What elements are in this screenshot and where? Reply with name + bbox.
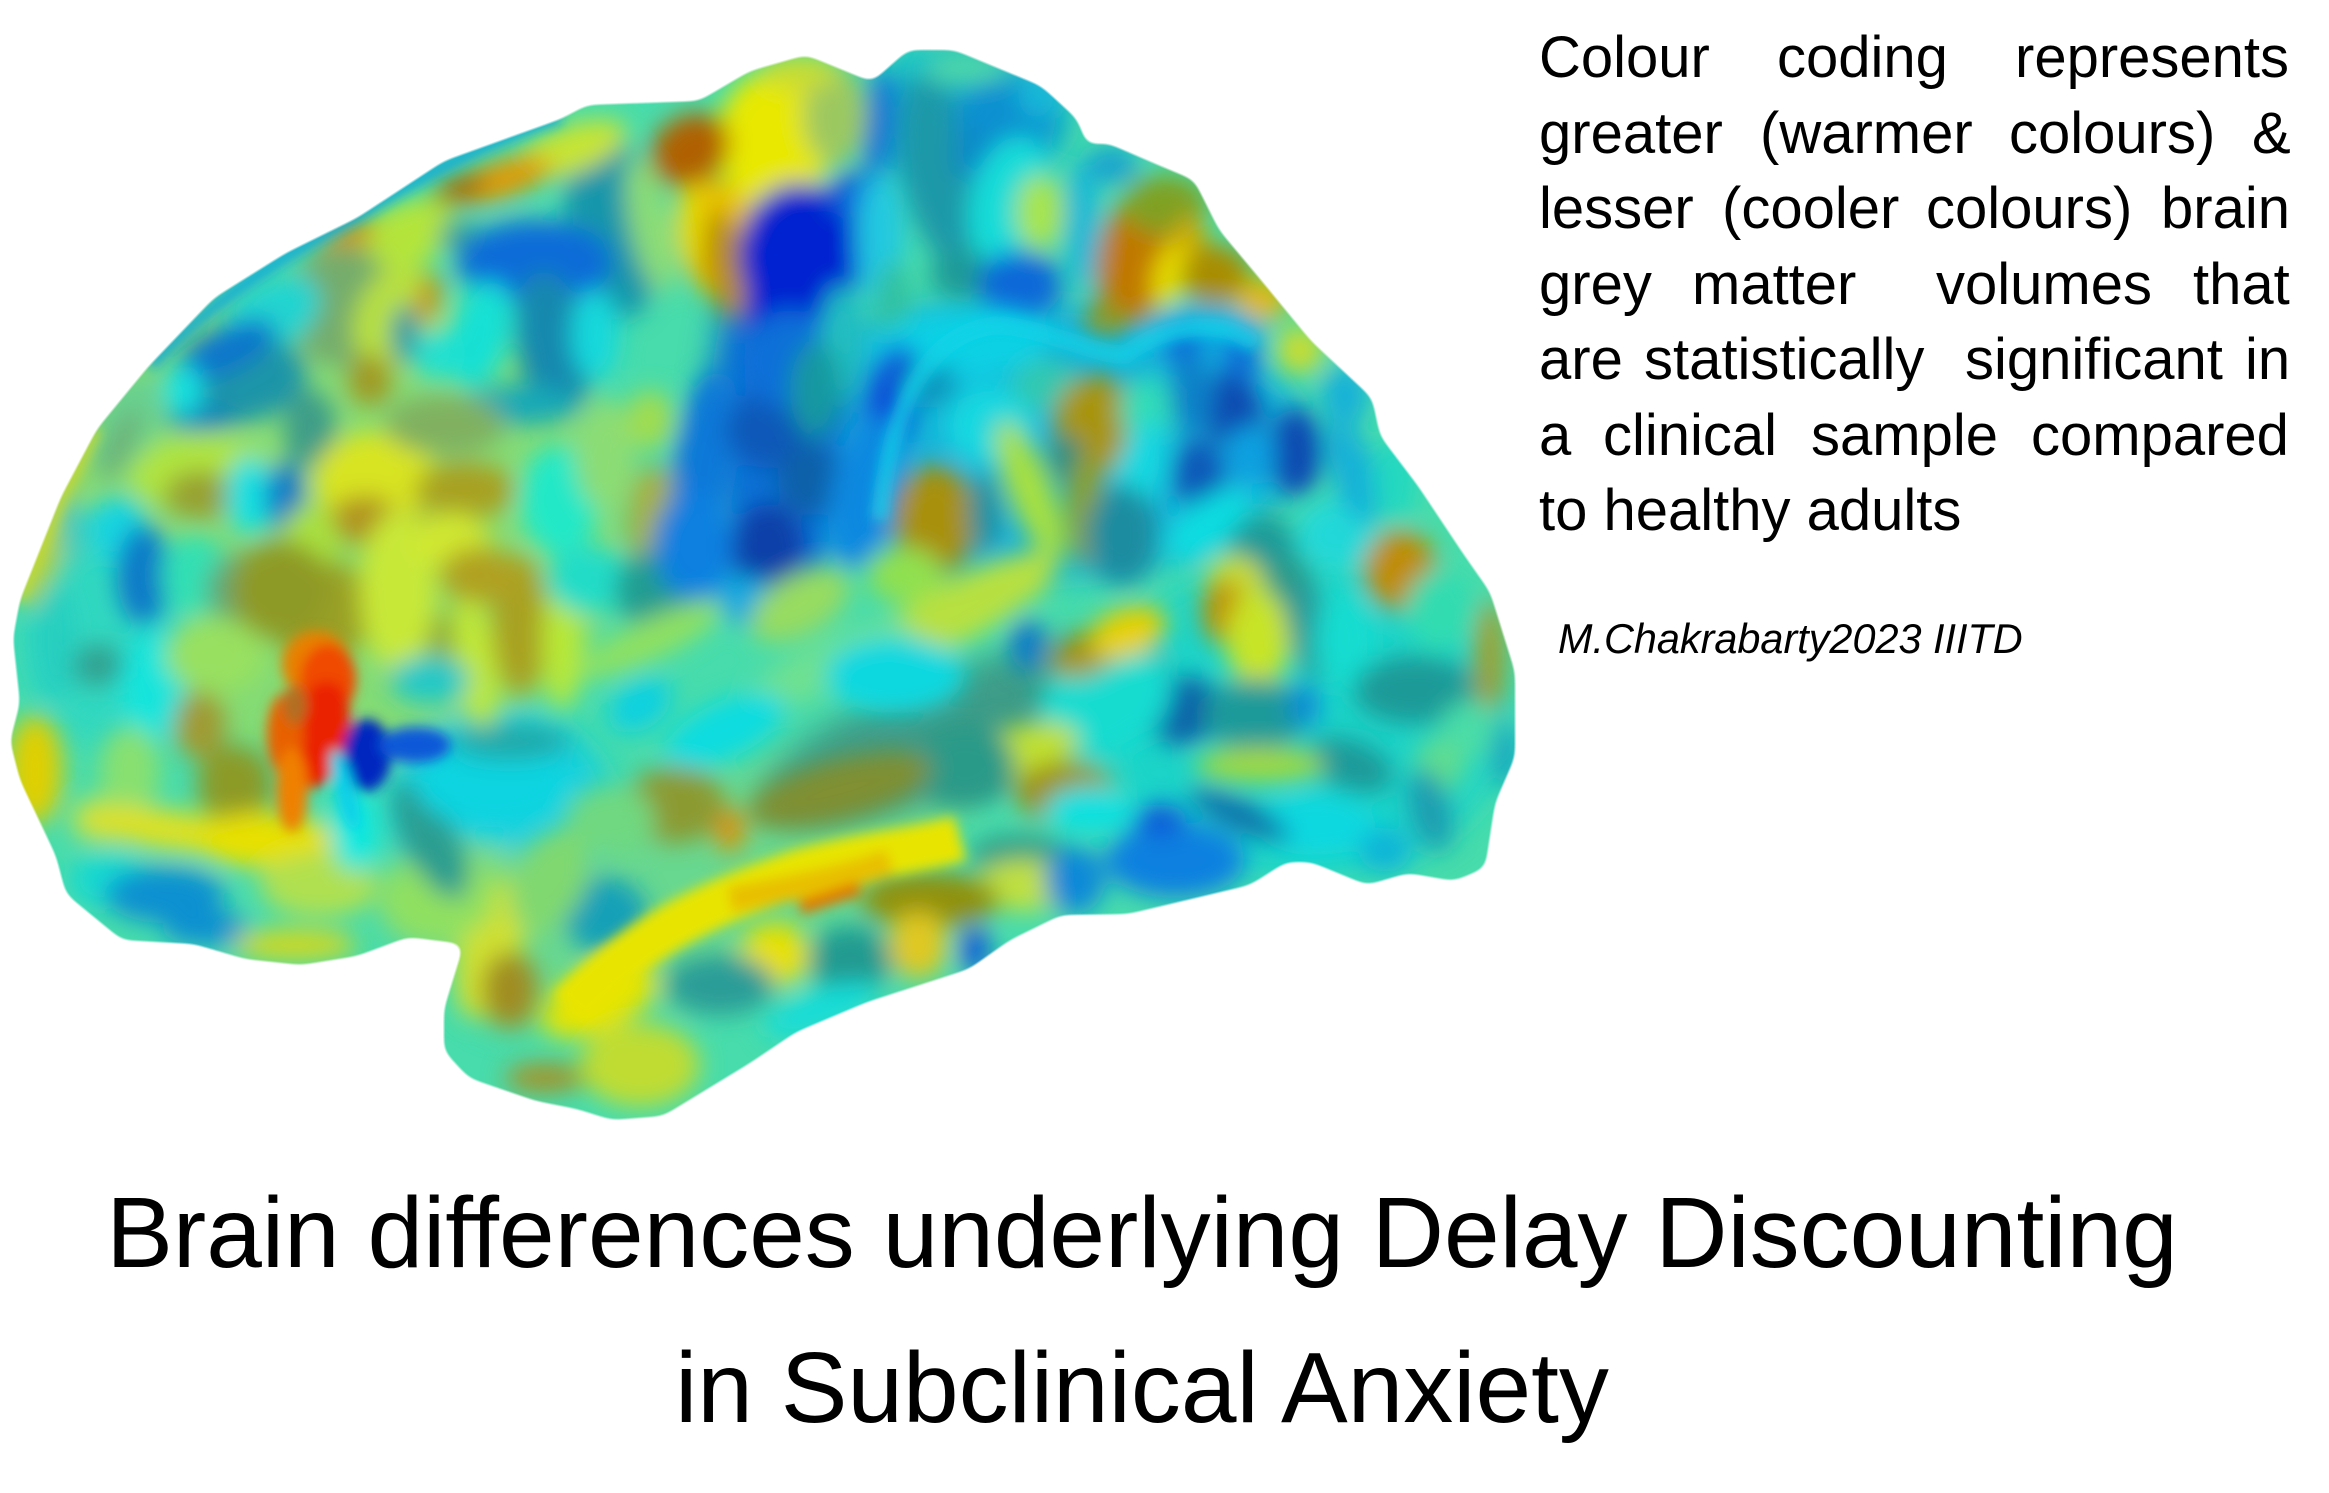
parietal gyrus [867, 301, 1053, 389]
frontal patches [187, 330, 320, 436]
occipital [1202, 580, 1246, 644]
description text block [1539, 25, 2291, 543]
blue arch [457, 220, 613, 304]
description text block: compared [2031, 403, 2289, 468]
description text block: a [1539, 403, 1572, 468]
small gyri [339, 255, 451, 385]
description text block: statistically [1644, 327, 1924, 392]
brain surface map [0, 40, 1530, 1130]
description text block: greater [1539, 101, 1723, 166]
description text block: clinical [1603, 403, 1777, 468]
description text block: & [2252, 101, 2291, 166]
postcentral [955, 127, 1065, 273]
lower frontal and insula [67, 645, 127, 685]
description text block: coding [1777, 25, 1948, 90]
description text block: represents [2015, 25, 2289, 90]
description text block: Colour [1539, 25, 1710, 90]
temporal [1017, 617, 1193, 783]
description text block: lesser [1539, 176, 1694, 241]
description text block: to healthy adults [1539, 478, 1961, 543]
right gyrus [1145, 305, 1265, 365]
description text block: matter [1692, 252, 1856, 317]
title [106, 1177, 2178, 1444]
description text block: brain [2161, 176, 2290, 241]
description text block: (warmer [1760, 101, 1973, 166]
description text block: sample [1811, 403, 1998, 468]
description text block: that [2193, 252, 2290, 317]
description text block: (cooler [1722, 176, 1899, 241]
title: in Subclinical Anxiety [675, 1332, 1609, 1444]
description text block: grey [1539, 252, 1652, 317]
description text block: are [1539, 327, 1623, 392]
title: Brain differences underlying Delay Discounting [106, 1177, 2178, 1289]
central blue [660, 366, 750, 564]
description text block: significant [1965, 327, 2223, 392]
description text block: in [2245, 327, 2290, 392]
frontal inferior loop [360, 510, 436, 670]
description text block: volumes [1936, 252, 2152, 317]
description text block: colours) [1926, 176, 2132, 241]
author credit: M.Chakrabarty2023 IIITD [1558, 616, 2023, 662]
description text block: colours) [2009, 101, 2215, 166]
central sulcus frontal side [553, 125, 671, 325]
